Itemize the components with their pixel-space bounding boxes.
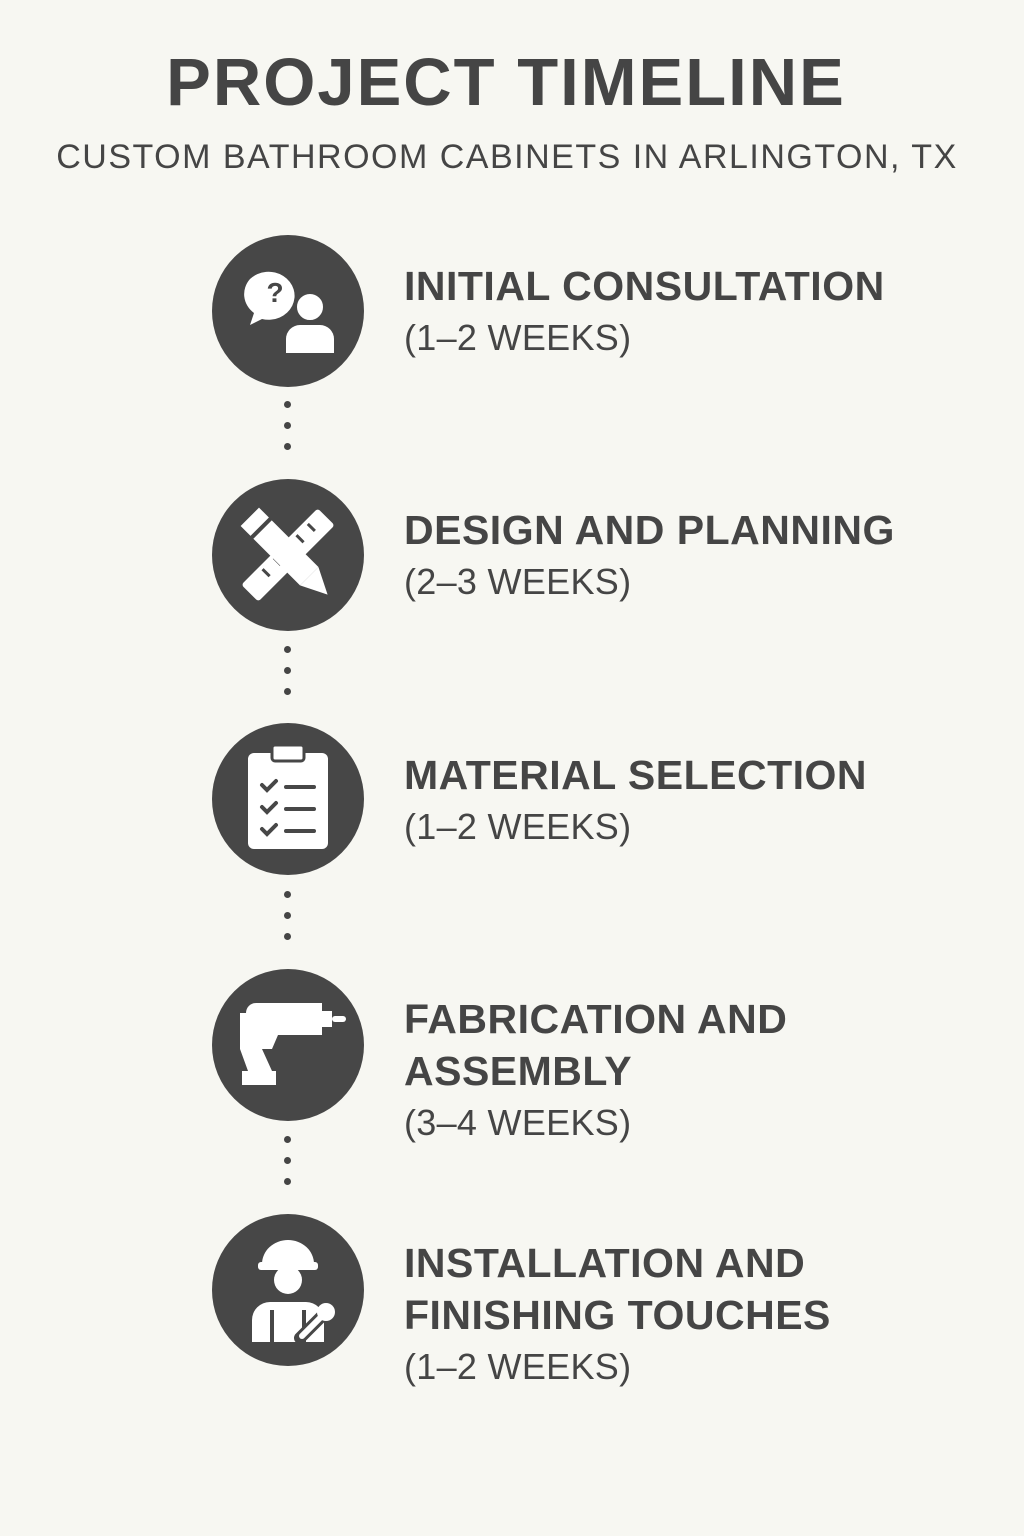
step 5 text: FINISHING TOUCHES xyxy=(404,1292,831,1338)
step 1 text: (1–2 WEEKS) xyxy=(404,317,631,358)
icon: consultation: ? xyxy=(266,277,284,308)
step 5 text: (1–2 WEEKS) xyxy=(404,1346,631,1387)
dotted connector 4 xyxy=(284,1136,291,1185)
step 3 text xyxy=(404,752,867,847)
step 3 text: MATERIAL SELECTION xyxy=(404,752,867,798)
step 1 text xyxy=(404,263,885,358)
step 4 text xyxy=(404,996,787,1143)
subtitle: CUSTOM BATHROOM CABINETS IN ARLINGTON, TX xyxy=(56,138,958,176)
icon: pencil and ruler xyxy=(212,479,364,631)
title: PROJECT TIMELINE xyxy=(166,45,846,120)
step 1 text: INITIAL CONSULTATION xyxy=(404,263,885,309)
icon: consultation xyxy=(212,235,364,387)
dotted connector 2 xyxy=(284,646,291,695)
step 2 text: (2–3 WEEKS) xyxy=(404,561,631,602)
dotted connector 1 xyxy=(284,401,291,450)
step 5 text: INSTALLATION AND xyxy=(404,1240,805,1286)
dotted connector 3 xyxy=(284,891,291,940)
icon: drill xyxy=(212,969,364,1121)
step 5 text xyxy=(404,1240,831,1387)
step 2 text: DESIGN AND PLANNING xyxy=(404,507,895,553)
step 3 text: (1–2 WEEKS) xyxy=(404,806,631,847)
step 4 text: (3–4 WEEKS) xyxy=(404,1102,631,1143)
icon: clipboard checklist xyxy=(212,723,364,875)
icon: installer worker xyxy=(212,1214,364,1366)
step 4 text: ASSEMBLY xyxy=(404,1048,632,1094)
step 4 text: FABRICATION AND xyxy=(404,996,787,1042)
step 2 text xyxy=(404,507,895,602)
